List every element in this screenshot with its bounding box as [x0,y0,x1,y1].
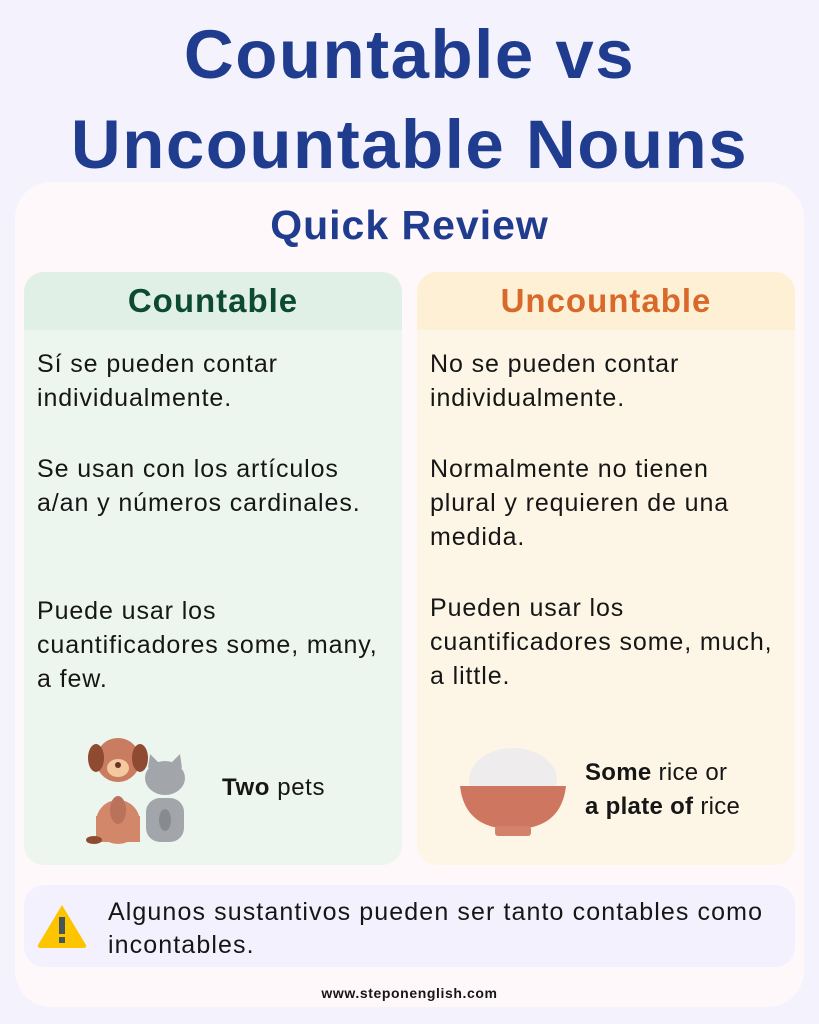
text: uncountable 1 [430,350,679,412]
icon: warning [38,905,86,948]
text: countable 2: a/an y números cardinales. [37,489,361,517]
text: countable 1: individualmente. [37,384,232,412]
label: rice [585,759,740,820]
text: uncountable 3 [430,594,773,690]
subtitle: Quick Review [270,202,549,248]
text: note [108,898,763,959]
label: rice: a plate of rice [585,793,740,820]
text: note: incontables. [108,931,255,959]
title: Uncountable Nouns [71,106,748,183]
icon: dog and cat [86,738,185,844]
text: countable 3: Puede usar los [37,597,216,625]
text: uncountable 2: plural y requieren de una [430,489,729,517]
callout: note [24,885,795,967]
text: uncountable 2: Normalmente no tienen [430,455,709,483]
label: two pets: Two pets [222,774,325,801]
text: countable 3: cuantificadores some, many, [37,631,378,659]
text: uncountable 3: a little. [430,662,510,690]
text: uncountable 1: individualmente. [430,384,625,412]
heading: countable [24,272,402,330]
title [71,16,748,183]
panel: uncountable [417,272,795,865]
text: countable 1 [37,350,278,412]
text: uncountable 1: No se pueden contar [430,350,679,378]
text: countable 1: Sí se pueden contar [37,350,278,378]
heading: countable: Countable [128,282,298,319]
label: rice: Some rice or [585,759,727,786]
text: uncountable 3: cuantificadores some, much, [430,628,773,656]
text: countable 2: Se usan con los artículos [37,455,339,483]
heading: uncountable: Uncountable [501,282,711,319]
text: countable 2 [37,455,361,517]
main card [15,182,804,1007]
footer url: www.steponenglish.com [321,985,498,1001]
text: note: Algunos sustantivos pueden ser tanto contables como [108,898,763,926]
title: Countable vs [184,16,635,93]
text: countable 3 [37,597,378,693]
heading: uncountable [417,272,795,330]
icon: rice bowl [460,748,566,836]
text: uncountable 2: medida. [430,523,525,551]
panel: countable [24,272,402,865]
text: uncountable 3: Pueden usar los [430,594,624,622]
text: countable 3: a few. [37,665,108,693]
text: uncountable 2 [430,455,729,551]
